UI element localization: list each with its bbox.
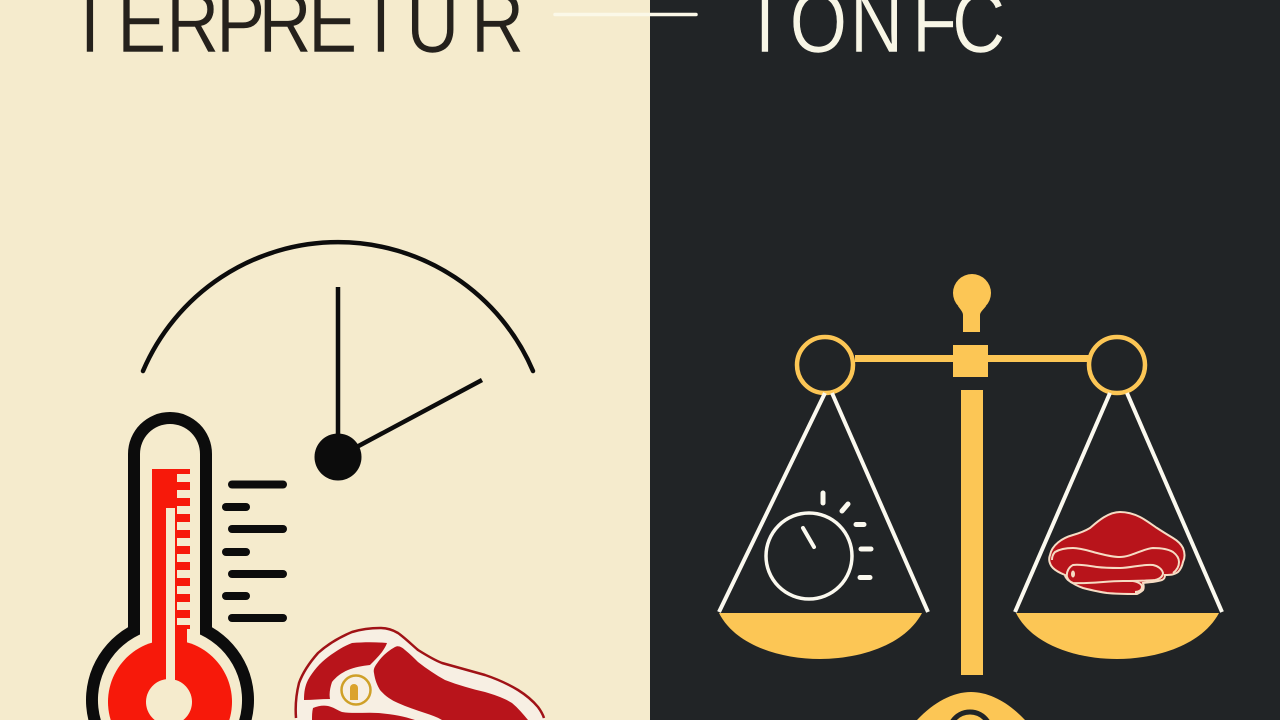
left pan [719, 613, 922, 659]
icon: timer dial on scale [766, 493, 871, 599]
scale base ornament [917, 692, 1025, 720]
right pan [1016, 613, 1219, 659]
icon: gauge dial [143, 242, 533, 480]
icon: balance scale frame [797, 274, 1145, 675]
divider line [555, 13, 696, 16]
steak medallion [342, 676, 370, 704]
thermometer scale ticks [226, 484, 283, 618]
scale strings [719, 393, 1222, 612]
icon: thermometer [86, 412, 254, 720]
icon: raw steak [296, 628, 545, 720]
icon: meat on scale [1049, 512, 1184, 594]
